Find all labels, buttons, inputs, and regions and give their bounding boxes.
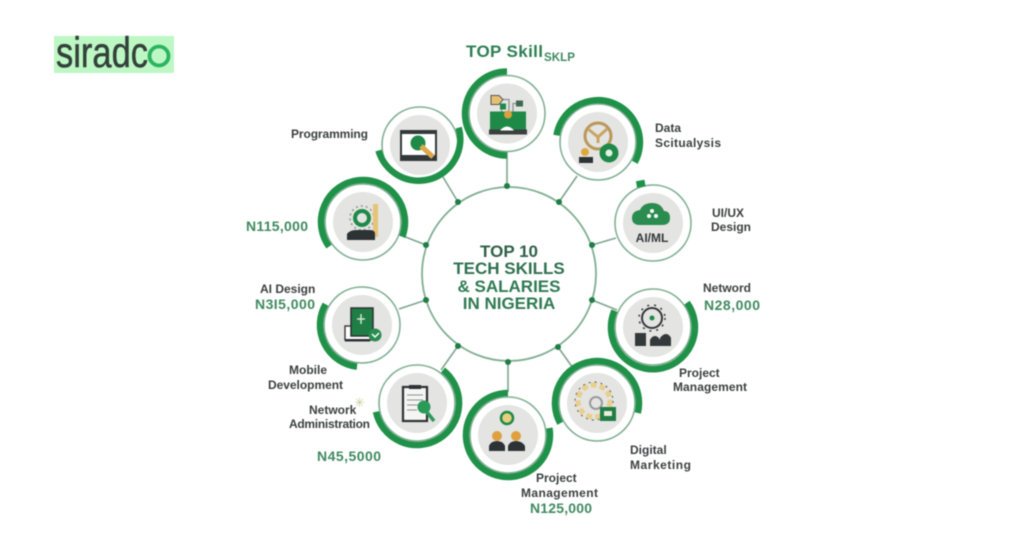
- label: digital marketing: Marketing: [630, 458, 691, 472]
- label: digital marketing: Digital: [630, 443, 667, 457]
- label: network administration: [289, 395, 370, 431]
- heading: top skill: [466, 42, 575, 64]
- central title: TECH SKILLS: [453, 259, 565, 278]
- central title: IN NIGERIA: [463, 294, 555, 313]
- icon: gear and people: [347, 204, 378, 240]
- icon: cloud: AI/ML: [636, 231, 668, 245]
- label: project management right: [673, 366, 747, 394]
- icon: gauge and gear: [579, 123, 618, 163]
- node: project management bottom: [466, 393, 550, 477]
- node: programming: [378, 107, 460, 183]
- node: ai design: [320, 287, 400, 367]
- label: network administration: ✳: [354, 395, 365, 410]
- salary: n45,5000: N45,5000: [317, 448, 381, 464]
- label: network administration: Administration: [289, 417, 370, 431]
- central title: & SALARIES: [458, 277, 560, 296]
- logo: siradc: [56, 29, 148, 77]
- label: ui/ux design: UI/UX: [712, 206, 744, 220]
- label: ai design salary: N3I5,000: [255, 296, 315, 312]
- label: mobile development: [268, 363, 343, 392]
- label: ai design salary: [255, 282, 315, 312]
- spokes and hub connectors: [399, 150, 617, 392]
- icon: web and cart: [575, 382, 616, 421]
- label: network salary: N28,000: [704, 297, 760, 313]
- label: digital marketing: [630, 443, 691, 472]
- label: project management bottom: N125,000: [530, 500, 592, 516]
- icon: target and people: [635, 305, 671, 346]
- label: mobile development: Development: [268, 378, 343, 392]
- label: network salary: Netword: [703, 281, 751, 295]
- heading: top skill: SKLP: [544, 50, 575, 64]
- label: ai design salary: AI Design: [260, 282, 315, 296]
- node: data analysis: [556, 100, 640, 180]
- salary: n115,000: N115,000: [246, 218, 308, 234]
- node: network administration: [376, 365, 459, 445]
- heading: top skill: TOP Skill: [466, 42, 543, 61]
- label: data scitualysis: Scitualysis: [655, 136, 721, 150]
- label: programming: Programming: [291, 127, 368, 141]
- label: data scitualysis: [655, 121, 721, 150]
- node: salary n115,000: [321, 180, 405, 260]
- label: project management bottom: [521, 471, 598, 516]
- label: ui/ux design: [711, 206, 751, 234]
- label: project management right: Management: [673, 380, 747, 394]
- central title: TOP 10: [480, 242, 538, 261]
- label: project management right: Project: [679, 366, 720, 380]
- label: ui/ux design: Design: [711, 220, 751, 234]
- icon: laptop workflow: [489, 96, 527, 134]
- label: project management bottom: Management: [521, 486, 598, 500]
- label: mobile development: Mobile: [289, 363, 327, 377]
- central hub circle: [422, 183, 596, 365]
- icon: coin and people: [489, 412, 525, 451]
- label: network administration: Network: [309, 403, 357, 417]
- node: network: [611, 289, 695, 369]
- icon: tablet and check: [345, 308, 382, 342]
- label: project management bottom: Project: [536, 471, 577, 485]
- label: network salary: [703, 281, 760, 313]
- label: data scitualysis: Data: [655, 121, 681, 135]
- node: top skill: [465, 72, 545, 156]
- icon: clipboard and key: [403, 385, 434, 421]
- node: ai/ml: [615, 183, 691, 261]
- node: digital marketing: [555, 361, 639, 441]
- icon: monitor: [401, 131, 436, 160]
- central title: [453, 242, 565, 313]
